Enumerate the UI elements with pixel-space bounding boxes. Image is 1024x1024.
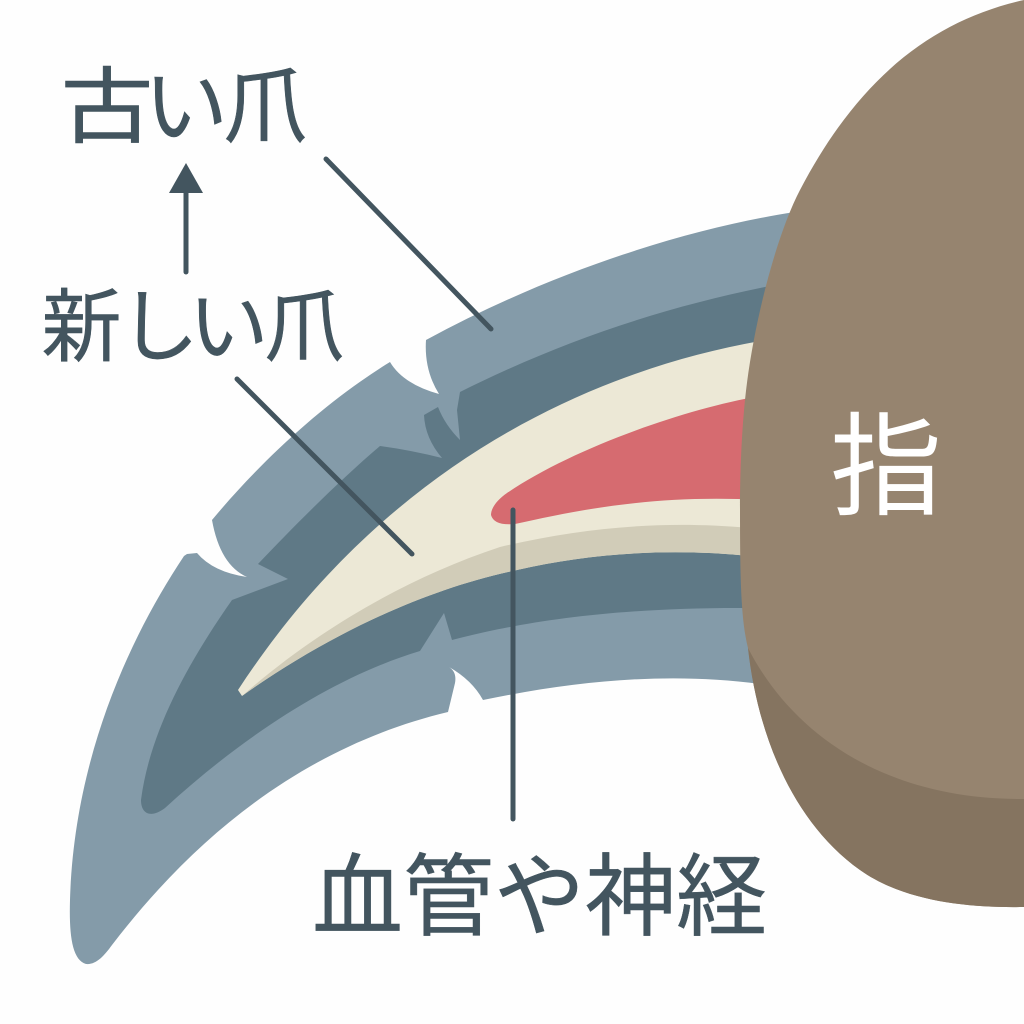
- label: old claw: [61, 60, 308, 154]
- old claw outer layer: [70, 212, 800, 964]
- leader line: old claw: [326, 159, 491, 329]
- finger shaded lower side: [748, 648, 1024, 907]
- label: new claw: し: [119, 283, 199, 372]
- label: blood vessels and nerves: 血管や神経: [312, 848, 767, 948]
- label: new claw: [42, 283, 344, 372]
- label: new claw: い: [188, 283, 268, 372]
- old claw inner dark layer: [141, 286, 780, 814]
- label: new claw: 新: [42, 283, 122, 372]
- label: old claw: 古: [61, 61, 153, 154]
- leader line: new claw: [237, 379, 412, 554]
- label: old claw: い: [144, 60, 228, 154]
- arrow: new claw to old claw: [169, 163, 203, 272]
- label: old claw: 爪: [223, 60, 308, 154]
- finger label: 指: [830, 405, 942, 530]
- label: new claw: 爪: [264, 283, 344, 372]
- new claw: [238, 341, 760, 696]
- new claw shaded underside: [242, 525, 750, 696]
- blood vessels and nerves: [491, 396, 760, 524]
- leader line: blood vessels and nerves: [510, 510, 516, 819]
- finger: [740, 0, 1024, 907]
